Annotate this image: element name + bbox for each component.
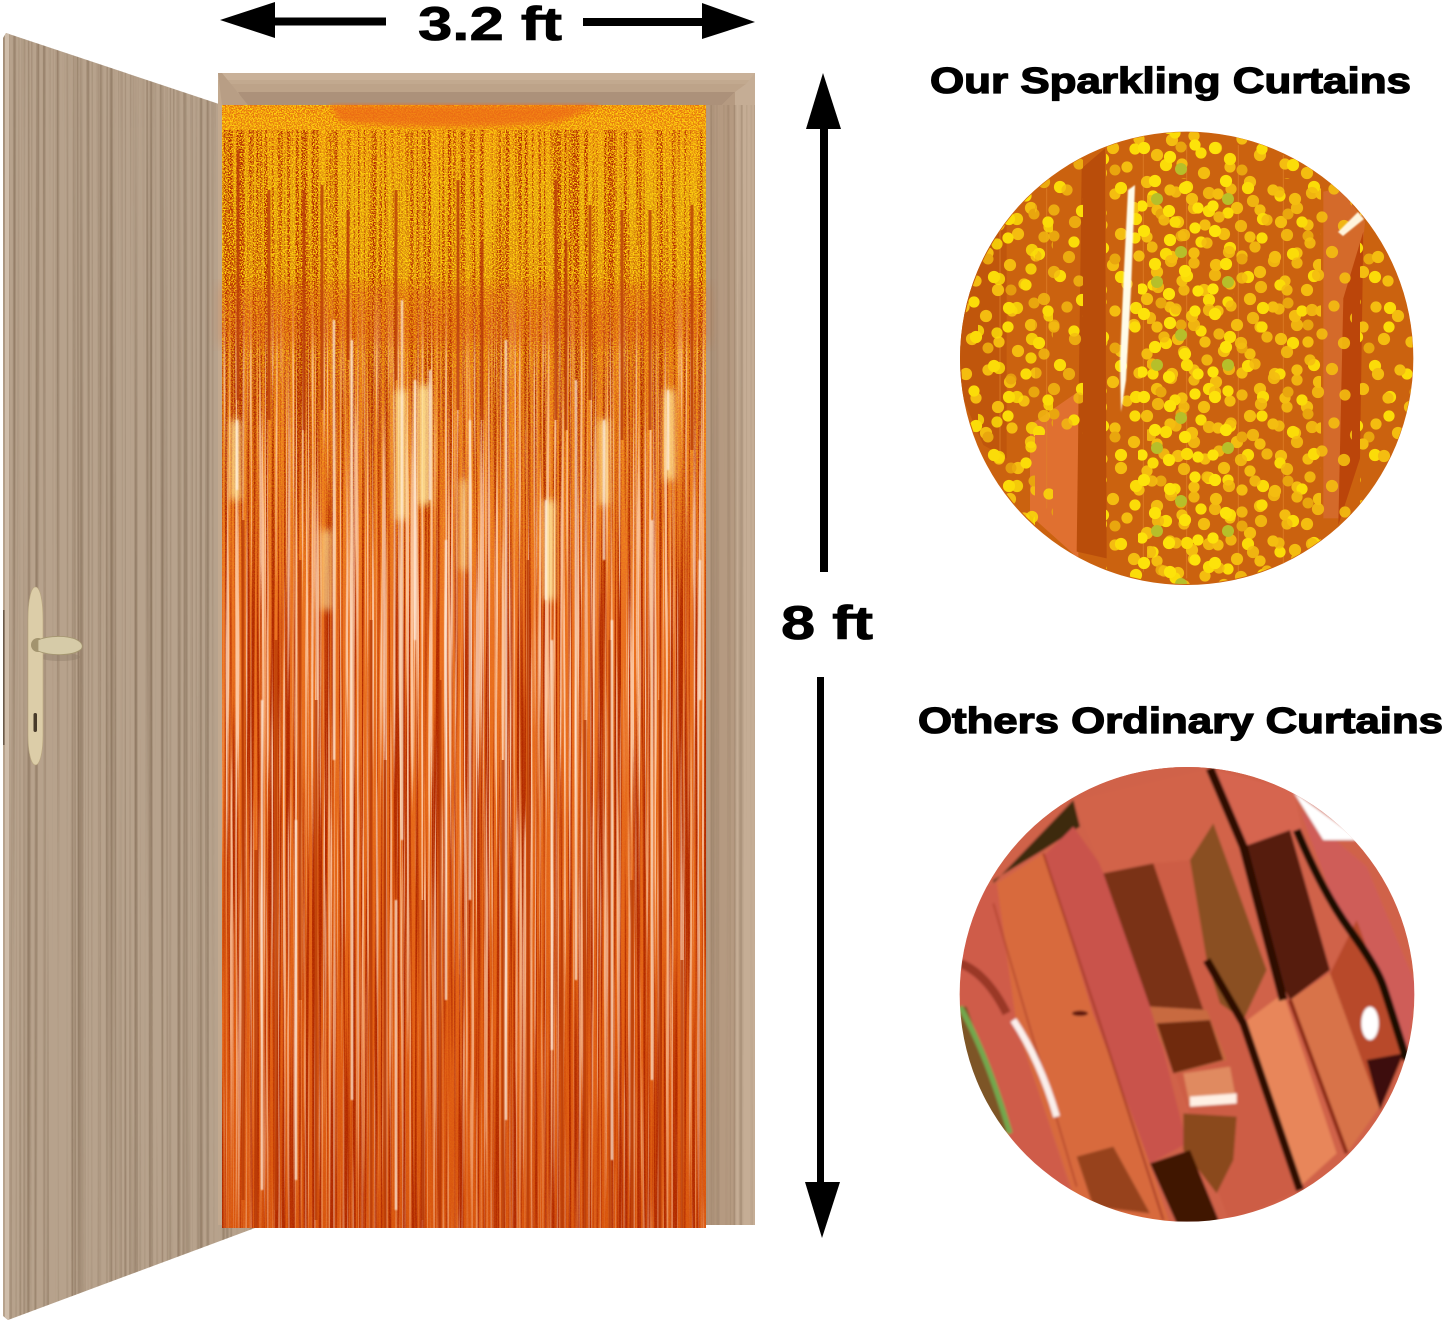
curtain — [222, 105, 706, 1228]
curtain top band — [330, 105, 600, 127]
ordinary curtain sample circle — [960, 767, 1414, 1222]
white glint — [1120, 185, 1135, 412]
curtain light strands — [222, 288, 706, 1228]
height label: 8 ft — [781, 596, 873, 649]
height dimension arrow — [805, 73, 841, 1238]
heading: other curtains: Others Ordinary Curtains — [918, 700, 1443, 741]
dark red strands — [238, 150, 692, 1228]
white strands — [237, 300, 700, 1210]
curtain glitter — [222, 105, 706, 1228]
red blotch band — [222, 285, 706, 345]
door leaf — [0, 30, 260, 1323]
heading: our curtains: Our Sparkling Curtains — [930, 60, 1411, 101]
sparkling curtain sample circle — [960, 132, 1414, 585]
door frame — [218, 73, 755, 1225]
bright glow strands — [231, 385, 674, 610]
curtain streaks dark — [222, 130, 706, 1228]
glitter dots — [961, 132, 1413, 584]
width dimension arrow — [220, 2, 755, 39]
door handle — [28, 587, 82, 765]
